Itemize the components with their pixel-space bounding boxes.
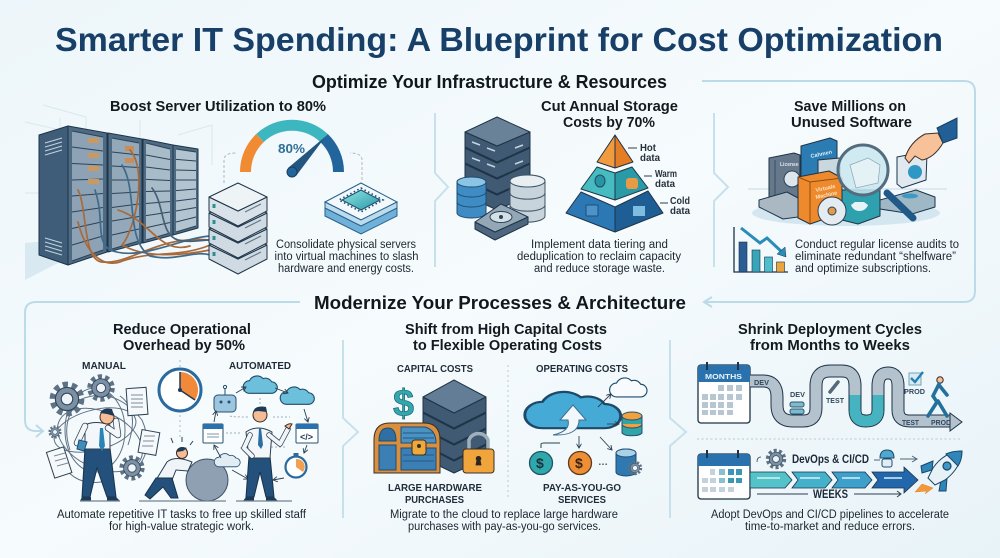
icon: software boxes and magnifier: License — [780, 162, 799, 168]
operating caption: PAY-AS-YOU-GO — [543, 482, 621, 494]
body text: Adopt DevOps and CI/CD pipelines to accelerate — [711, 509, 949, 521]
icon: server stack — [423, 380, 486, 473]
label: manual: MANUAL — [82, 360, 127, 372]
icon: pipeline robot — [757, 450, 917, 467]
pyramid labels — [628, 143, 690, 217]
body text — [795, 239, 959, 275]
heading: Shift from High Capital Costs — [405, 322, 607, 338]
body text — [517, 239, 681, 275]
heading: to Flexible Operating Costs — [413, 338, 602, 354]
path labels: DEV — [754, 378, 769, 387]
body text: for high-value strategic work. — [109, 521, 254, 533]
icon: clock — [159, 360, 201, 440]
icon: cloud services: $ — [536, 455, 544, 471]
pyramid labels: data — [640, 153, 660, 164]
path labels — [754, 378, 952, 427]
panel: server utilization — [25, 99, 418, 280]
icon: cloud services: $ — [575, 455, 583, 471]
dividers with chevrons — [343, 113, 728, 518]
icon: cloud services: … — [598, 457, 608, 468]
icon: devops gear — [768, 450, 784, 468]
icon: consolidated server stack — [209, 183, 267, 274]
panel: capital to operating — [374, 322, 647, 533]
body text: purchases with pay-as-you-go services. — [408, 521, 601, 533]
icons: dev blocks and wrench — [790, 382, 838, 414]
illustration: automated workflow: </> — [300, 432, 313, 442]
capital caption — [388, 482, 482, 506]
label: operating costs: OPERATING COSTS — [536, 363, 628, 375]
heading: Save Millions on — [794, 99, 906, 115]
body text: and optimize subscriptions. — [795, 263, 931, 275]
icon: server racks — [39, 126, 198, 265]
pyramid labels: Warm — [655, 169, 677, 180]
label: capital costs: CAPITAL COSTS — [397, 363, 473, 375]
operating caption — [543, 482, 621, 506]
capital caption: LARGE HARDWARE — [388, 482, 482, 494]
dashed separator — [697, 438, 962, 440]
panel: unused software — [734, 99, 959, 275]
icon: cables — [78, 150, 210, 263]
heading: Boost Server Utilization to 80% — [110, 99, 326, 115]
ground lines — [80, 500, 292, 502]
faint room backdrop — [25, 105, 212, 280]
icon: padlock — [463, 433, 494, 473]
illustration: manual chaos — [46, 376, 160, 501]
chart: short delivery arrows — [750, 467, 918, 493]
body text: Conduct regular license audits to — [795, 239, 959, 251]
body text: into virtual machines to slash — [274, 251, 418, 263]
chart: data tier pyramid — [566, 135, 663, 232]
body text: and reduce storage waste. — [534, 263, 665, 275]
label: weeks — [757, 489, 901, 501]
flow connector frame — [25, 81, 975, 437]
body text — [57, 509, 307, 533]
pyramid labels: Cold — [670, 196, 690, 207]
path labels: TEST — [902, 418, 919, 427]
gauge value: 80% — [278, 141, 305, 156]
path labels: DEV — [790, 390, 805, 399]
icon: months calendar — [698, 362, 750, 423]
heading: Cut Annual Storage — [541, 99, 678, 115]
operating caption: SERVICES — [558, 494, 606, 506]
body text: Consolidate physical servers — [276, 239, 416, 251]
heading: Costs by 70% — [563, 115, 655, 131]
heading — [113, 322, 251, 354]
chart: utilization gauge — [224, 125, 362, 183]
icon: months calendar: MONTHS — [705, 372, 742, 381]
path labels: PROD — [904, 387, 926, 396]
body text: Implement data tiering and — [531, 239, 668, 251]
chart: falling cost bars — [734, 227, 788, 272]
body text — [274, 239, 418, 275]
body text — [390, 509, 618, 533]
body text: eliminate redundant “shelfware” — [795, 251, 956, 263]
illustration: man pushing boulder — [145, 437, 228, 501]
heading: Shrink Deployment Cycles — [738, 322, 922, 338]
heading: Unused Software — [791, 115, 912, 131]
divider — [507, 365, 509, 500]
heading: Reduce Operational — [113, 322, 251, 338]
heading — [405, 322, 607, 354]
heading: Overhead by 50% — [123, 338, 245, 354]
capital caption: PURCHASES — [405, 494, 464, 506]
panel: deployment cycles — [697, 322, 962, 533]
title: Smarter IT Spending: A Blueprint for Cost Optimization — [55, 21, 943, 58]
body text: Migrate to the cloud to replace large hardware — [390, 509, 618, 521]
icon: rocket — [915, 451, 962, 494]
icon: checkbox — [909, 372, 923, 385]
pyramid labels: data — [670, 206, 690, 217]
body text — [711, 509, 949, 533]
section heading: optimize: Optimize Your Infrastructure & Resources — [312, 71, 667, 92]
pyramid labels: Hot — [640, 143, 657, 154]
icon: software boxes and magnifier — [748, 118, 957, 226]
label: weeks: WEEKS — [813, 489, 848, 501]
path labels: PROD — [931, 418, 952, 427]
body text: time-to-market and reduce errors. — [745, 521, 915, 533]
icon: chip on virtual host — [325, 183, 397, 234]
chart: long winding path — [750, 371, 962, 431]
illustration: automated workflow — [203, 376, 318, 501]
icon: storage stack — [457, 117, 545, 240]
label: devops: DevOps & CI/CD — [792, 452, 869, 466]
body text: Automate repetitive IT tasks to free up skilled staff — [57, 509, 307, 521]
icon: treasure chest — [374, 423, 440, 473]
icon: walking person — [928, 377, 947, 416]
icon: cloud services — [525, 378, 647, 476]
icon: software boxes and magnifier: Machine — [815, 191, 838, 201]
heading — [541, 99, 678, 131]
icon: dollar sign: $ — [393, 383, 414, 425]
panel: storage costs — [457, 99, 690, 275]
body text: deduplication to reclaim capacity — [517, 251, 681, 263]
path labels: TEST — [826, 396, 844, 405]
icon: software boxes and magnifier: Cahmen — [810, 149, 833, 160]
panel: operational overhead — [46, 322, 318, 533]
icon: weeks calendar — [698, 450, 750, 499]
body text: hardware and energy costs. — [278, 263, 414, 275]
heading — [791, 99, 912, 131]
icon: software boxes and magnifier: Virtuale — [815, 184, 836, 194]
heading — [738, 322, 922, 354]
heading: from Months to Weeks — [750, 338, 910, 354]
label: automated: AUTOMATED — [229, 360, 291, 372]
section heading: modernize: Modernize Your Processes & Architecture — [314, 292, 686, 313]
pyramid labels: data — [655, 179, 675, 190]
